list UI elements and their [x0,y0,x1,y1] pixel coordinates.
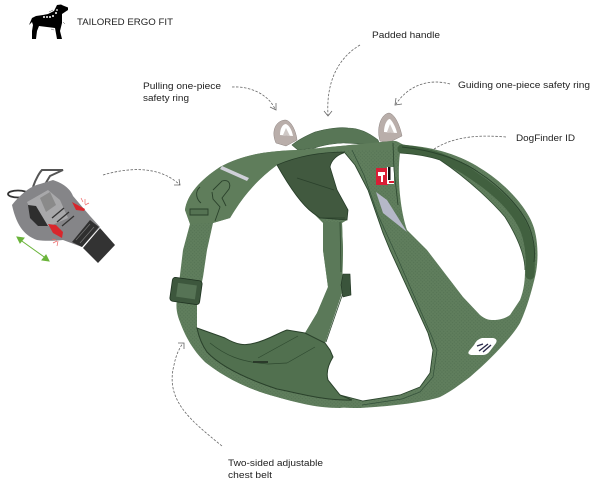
label: guiding safety ring: Guiding one-piece safety ring [458,80,590,90]
label: chest belt: chest belt [228,470,273,480]
reflective strip: chest [376,192,407,232]
hole: centre [325,153,433,401]
buckle small ring [8,190,28,198]
icon: dog silhouette [29,4,68,39]
label: chest belt [228,458,323,480]
harness body silhouette [176,141,537,408]
logo patch [468,338,497,355]
buckle inner plate [27,190,68,226]
label: pulling safety ring: Pulling one-piece [143,81,221,91]
arrow: chest belt [172,343,222,446]
buckle red clips [72,202,85,211]
padded handle [292,128,380,150]
label: DogFinder ID: DogFinder ID [516,133,576,143]
right strap buckle [341,274,351,297]
label: padded handle: Padded handle [372,30,440,40]
buckle slider bar [72,220,99,247]
pulling ring [274,120,297,146]
inner back padding [277,152,348,220]
gap beneath handle [316,143,346,149]
shoulder adjuster [190,181,230,221]
left strap buckle [169,277,203,305]
title: TAILORED ERGO FIT [77,17,174,27]
label: pulling safety ring [143,81,221,103]
green double arrow [17,237,49,261]
hole: left [197,165,328,345]
label: pulling safety ring: safety ring [143,93,189,103]
buckle body [12,180,100,247]
right strap [305,222,343,343]
arrow: DogFinder ID [409,136,506,175]
buckle sparks [52,198,89,246]
buckle strap [83,228,115,263]
right band padding [402,149,530,275]
illustration: buckle detail [8,170,115,263]
reflective strip: shoulder [220,166,249,181]
arrow: padded handle [324,45,360,116]
guiding ring [379,113,402,143]
buckle rear loop [33,170,63,187]
harness [169,113,538,408]
label: chest belt: Two-sided adjustable [228,458,323,468]
DogFinder tag [376,167,394,185]
hole: right [399,153,525,320]
arrow: buckle [103,170,180,185]
mesh band edges [340,153,433,401]
arrow: pulling ring [232,87,276,110]
arrow: guiding ring [395,82,450,105]
chest plate [197,328,362,408]
shoulder band [185,141,392,224]
right band stitching [400,147,535,270]
